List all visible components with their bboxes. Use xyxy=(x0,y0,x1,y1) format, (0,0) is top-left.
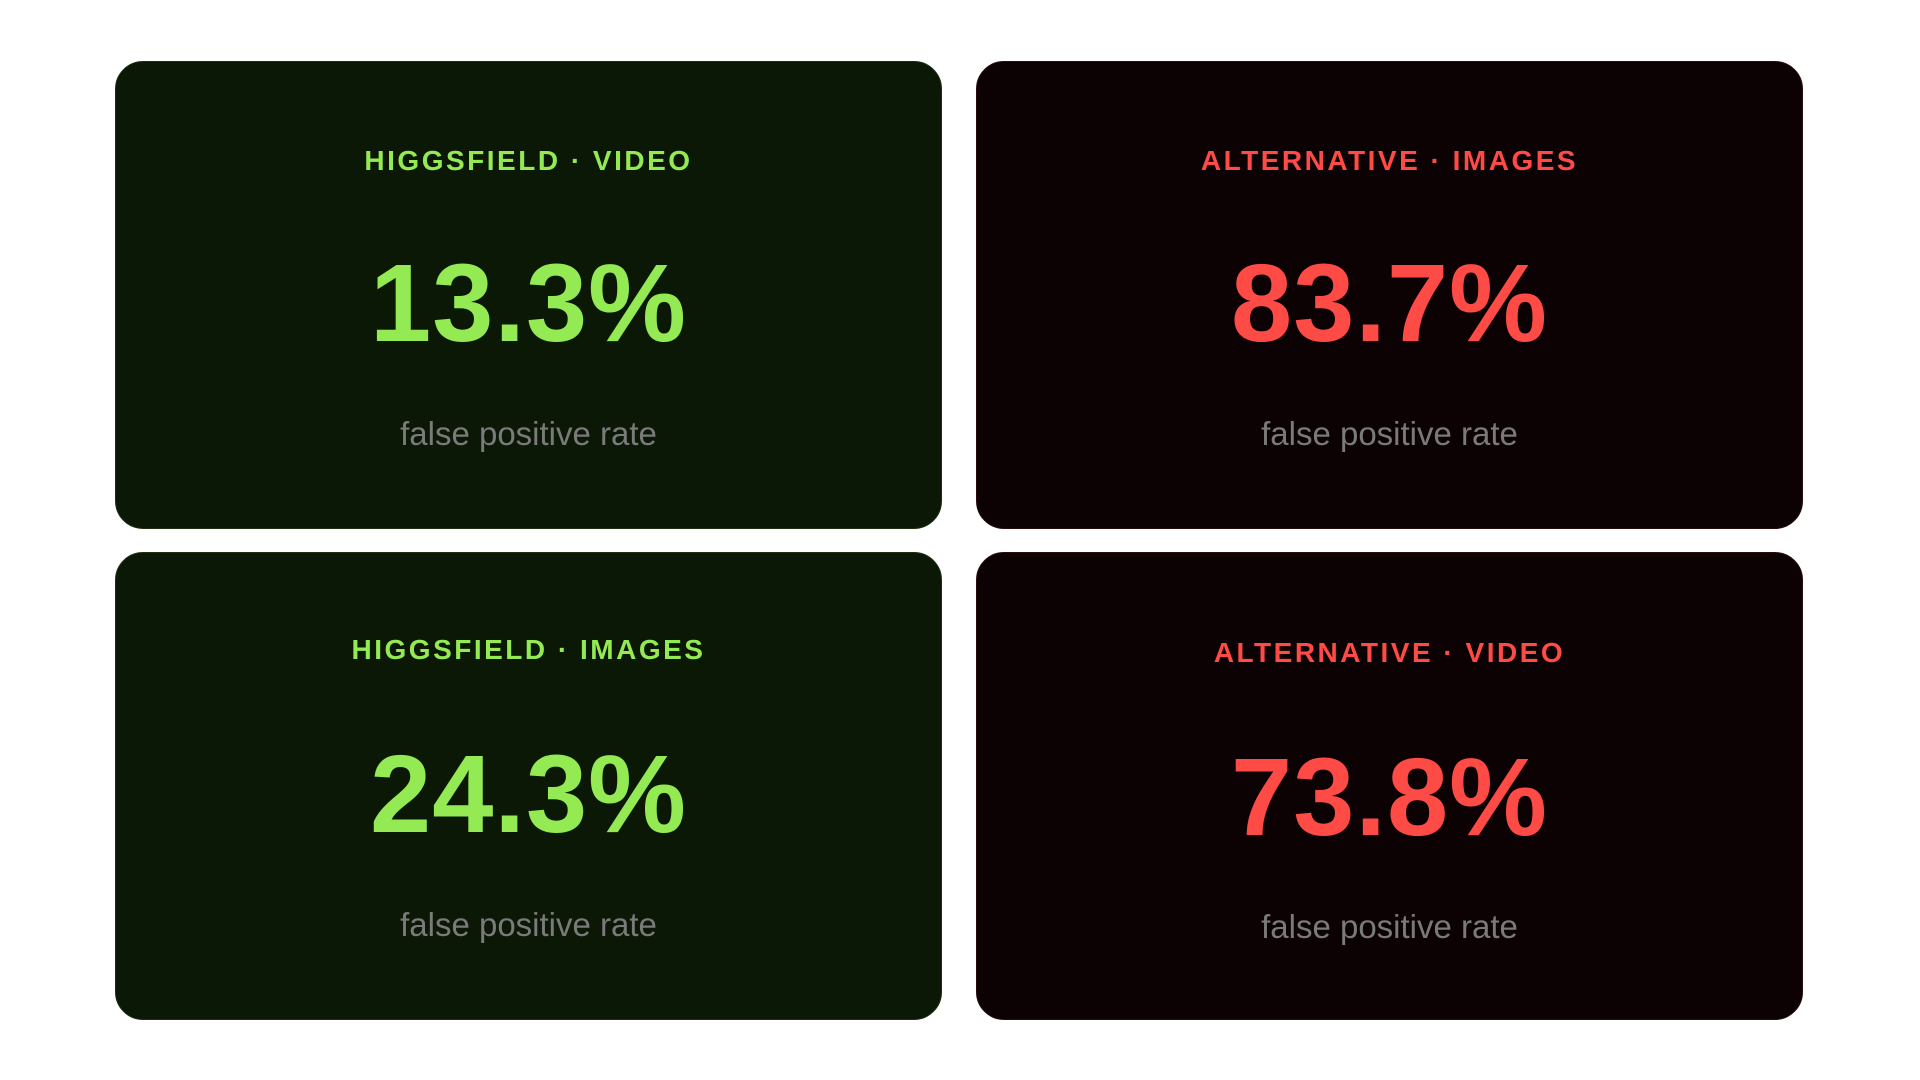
value: 24.3% xyxy=(370,733,687,856)
label: HIGGSFIELD · IMAGES xyxy=(352,634,705,665)
caption: false positive rate xyxy=(400,415,657,452)
value: 13.3% xyxy=(370,242,687,365)
panel: alternative video xyxy=(976,552,1803,1020)
label: ALTERNATIVE · VIDEO xyxy=(1214,637,1565,668)
caption: false positive rate xyxy=(400,906,657,943)
caption: false positive rate xyxy=(1261,415,1518,452)
label: HIGGSFIELD · VIDEO xyxy=(364,145,693,176)
caption: false positive rate xyxy=(1261,908,1518,945)
panel: higgsfield images xyxy=(115,552,942,1020)
value: 73.8% xyxy=(1231,736,1548,859)
panel: alternative images xyxy=(976,61,1803,529)
value: 83.7% xyxy=(1231,242,1548,365)
label: ALTERNATIVE · IMAGES xyxy=(1201,145,1578,176)
panel: higgsfield video xyxy=(115,61,942,529)
